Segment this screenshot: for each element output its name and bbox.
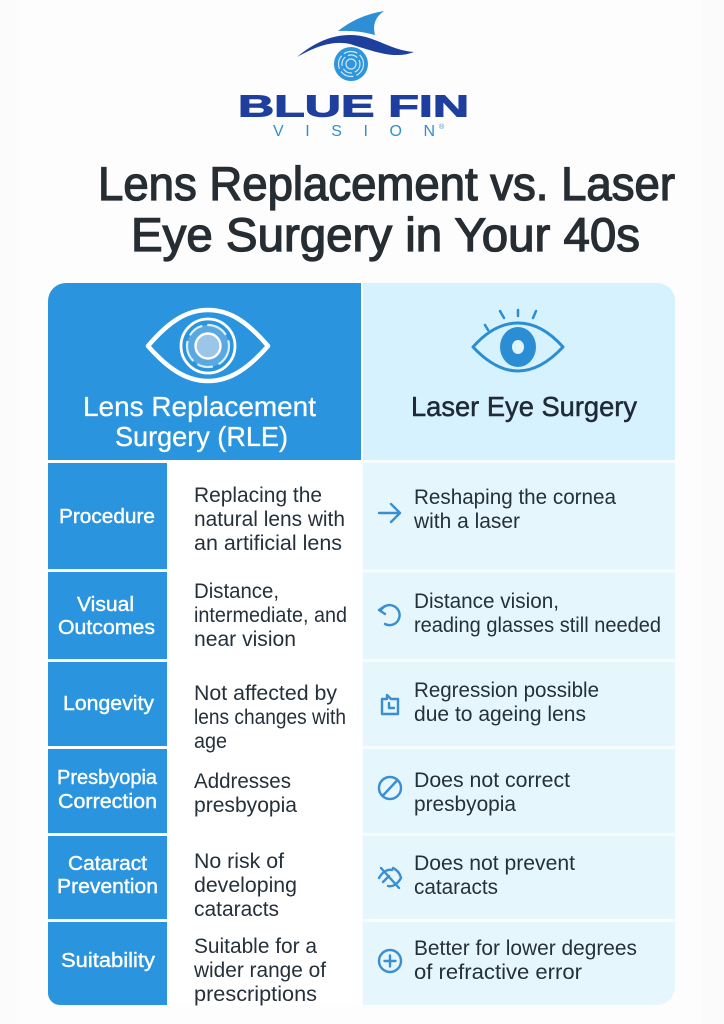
label: cataract prevention: Prevention [57, 875, 158, 898]
label: longevity: Longevity [63, 692, 155, 715]
text: lens replacement outcomes: Distance, [194, 579, 279, 603]
label: visual outcomes [48, 572, 167, 659]
text: laser longevity: Regression possible [414, 678, 599, 702]
text: lens replacement outcomes [194, 579, 347, 651]
icon: lens eye [148, 310, 268, 381]
title: Lens Replacement vs. Laser [98, 157, 675, 210]
text: lens replacement longevity: lens changes with [194, 705, 346, 729]
text: laser procedure [413, 485, 616, 533]
row: visual outcomes [48, 572, 661, 659]
text: lens replacement suitability: wider range of [193, 958, 326, 982]
heading: lens replacement: Surgery (RLE) [115, 421, 288, 452]
label: suitability: Suitability [61, 949, 156, 972]
text: laser outcomes: reading glasses still needed [414, 613, 661, 637]
text: laser longevity [414, 678, 599, 726]
text: lens replacement suitability: prescriptions [194, 982, 317, 1006]
text: laser presbyopia: presbyopia [414, 792, 516, 816]
label: suitability [48, 922, 167, 1005]
panel: laser eye surgery column background [363, 283, 675, 1005]
text: laser longevity: due to ageing lens [414, 702, 586, 726]
text: lens replacement cataract [194, 849, 297, 921]
text: laser suitability: Better for lower degrees [414, 936, 637, 960]
logo wave [297, 35, 414, 57]
text: lens replacement outcomes: intermediate, and [194, 603, 347, 627]
label: cataract prevention [48, 836, 167, 919]
panel: lens replacement header [48, 283, 361, 460]
text: lens replacement procedure: an artificial lens [194, 531, 342, 555]
row: cataract prevention [48, 836, 575, 921]
icon: crossed eye [379, 868, 401, 888]
text: lens replacement presbyopia [194, 769, 297, 817]
logo subtitle: VISION [273, 123, 435, 140]
row: longevity [48, 662, 599, 753]
icon: undo arrow [379, 605, 400, 625]
label: presbyopia correction: Presbyopia [57, 766, 158, 789]
heading: lens replacement: Lens Replacement [83, 391, 316, 422]
text: laser cataract [414, 851, 575, 899]
label: procedure [48, 463, 167, 569]
icon: prohibited [379, 777, 401, 799]
text: lens replacement procedure: natural lens with [194, 507, 345, 531]
panel: lens replacement column body [167, 463, 361, 1005]
text: lens replacement cataract: cataracts [194, 897, 279, 921]
text: lens replacement longevity: Not affected by [194, 681, 337, 705]
text: laser suitability [414, 936, 637, 984]
text: laser cataract: Does not prevent [414, 851, 575, 875]
title [98, 157, 675, 261]
text: laser procedure: Reshaping the cornea [414, 485, 616, 509]
label: visual outcomes: Outcomes [58, 616, 155, 639]
text: laser outcomes [414, 589, 661, 637]
logo fin [338, 11, 384, 35]
panel: laser eye surgery header [363, 283, 675, 460]
icon: arrow [379, 504, 400, 522]
text: laser presbyopia: Does not correct [414, 768, 570, 792]
row: suitability [48, 922, 637, 1006]
label: presbyopia correction [48, 749, 167, 833]
icon: laser eye [473, 310, 563, 371]
row: presbyopia correction [48, 749, 570, 833]
text: lens replacement cataract: developing [194, 873, 297, 897]
text: laser presbyopia [414, 768, 570, 816]
text: lens replacement procedure [194, 483, 345, 555]
text: lens replacement procedure: Replacing the [194, 483, 322, 507]
text: lens replacement cataract: No risk of [194, 849, 284, 873]
text: lens replacement longevity [194, 681, 346, 753]
row: procedure [48, 463, 616, 569]
label: cataract prevention: Cataract [68, 852, 147, 875]
text: lens replacement suitability: Suitable for a [194, 934, 317, 958]
logo iris [334, 47, 368, 81]
text: lens replacement presbyopia: Addresses [194, 769, 291, 793]
title: Eye Surgery in Your 40s [131, 208, 640, 261]
icon: plus circle [379, 950, 401, 972]
text: lens replacement presbyopia: presbyopia [194, 793, 297, 817]
logo wordmark: BLUE FIN [238, 88, 469, 124]
heading: laser eye surgery: Laser Eye Surgery [411, 391, 637, 422]
label: longevity [48, 662, 167, 746]
text: lens replacement outcomes: near vision [194, 627, 296, 651]
text: lens replacement longevity: age [194, 729, 227, 753]
heading: lens replacement [83, 391, 316, 452]
text: laser suitability: of refractive error [414, 960, 582, 984]
text: laser procedure: with a laser [413, 509, 520, 533]
text: lens replacement suitability [193, 934, 326, 1006]
icon: clock document [382, 695, 398, 714]
label: visual outcomes: Visual [77, 593, 134, 616]
text: laser cataract: cataracts [414, 875, 498, 899]
text: laser outcomes: Distance vision, [414, 589, 559, 613]
label: procedure: Procedure [59, 505, 155, 528]
label: presbyopia correction: Correction [58, 790, 157, 813]
logo registered mark: ® [439, 123, 445, 131]
logo: Blue Fin Vision [238, 11, 469, 140]
